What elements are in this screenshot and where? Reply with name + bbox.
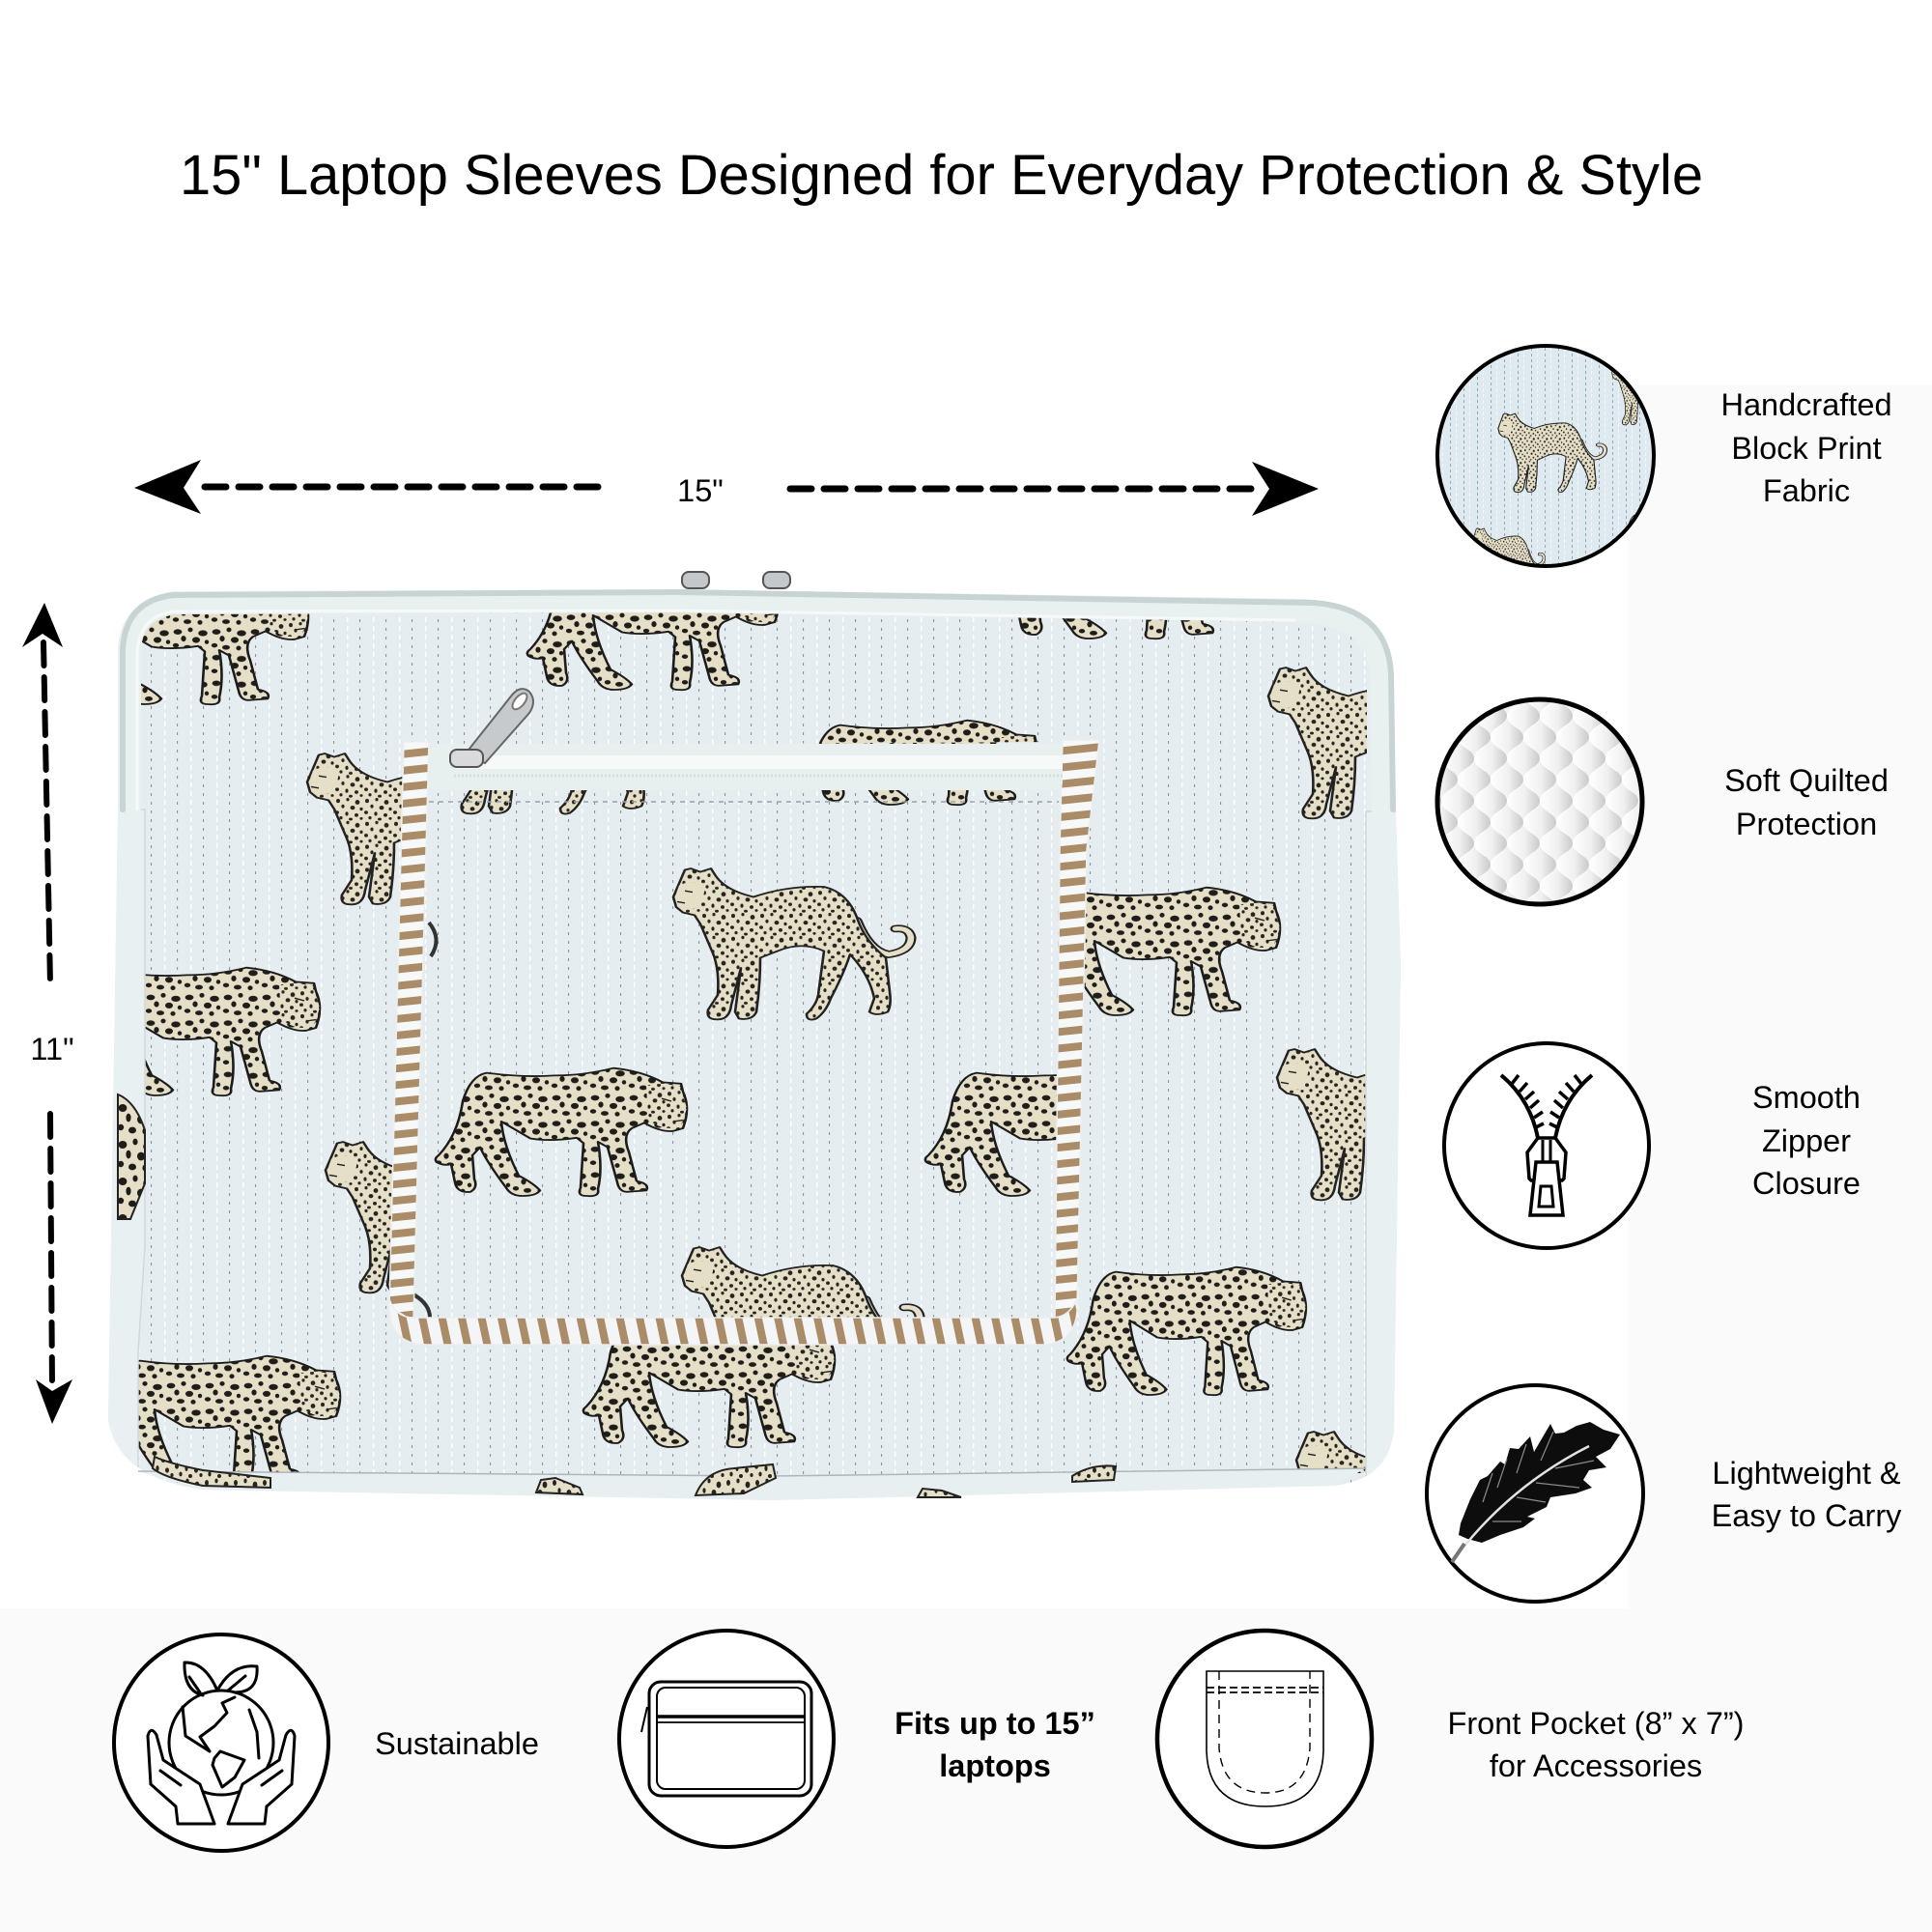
- background panel: bottom band: [0, 1608, 1932, 1932]
- pocket fabric: [413, 742, 1060, 1323]
- sleeve fabric body: [108, 589, 1401, 1500]
- feature: fits up to 15 inch laptops: [619, 1631, 1095, 1847]
- label: laptops: [939, 1748, 1051, 1783]
- label: Closure: [1752, 1166, 1861, 1201]
- icon: laptop sleeve outline: [619, 1631, 834, 1847]
- label: Fits up to 15”: [895, 1706, 1095, 1741]
- icon: fabric swatch: [1435, 344, 1656, 568]
- label: Lightweight &: [1712, 1456, 1901, 1491]
- quilting lines: [97, 580, 1410, 1507]
- front pocket: [388, 688, 1099, 1346]
- height dimension arrow: [22, 603, 74, 1424]
- leopard prints on sleeve: [57, 511, 1534, 1583]
- label: Sustainable: [375, 1726, 539, 1761]
- pocket quilting: [425, 791, 1053, 1318]
- label: Easy to Carry: [1712, 1498, 1902, 1533]
- background panel: right column: [1628, 384, 1932, 1611]
- laptop sleeve photo: [108, 571, 1401, 1500]
- width dimension arrow: [134, 460, 1319, 516]
- icon: feather: [1427, 1385, 1643, 1602]
- pocket zipper: [429, 744, 1063, 802]
- feature: block print fabric: [1435, 344, 1889, 568]
- pocket leopards: [413, 663, 1177, 1399]
- label: Block Print: [1731, 431, 1882, 466]
- width dimension arrow: 15": [677, 473, 724, 508]
- title: 15" Laptop Sleeves Designed for Everyday Protection & Style: [180, 144, 1703, 207]
- label: Soft Quilted: [1724, 763, 1889, 798]
- feature: front pocket: [1157, 1631, 1745, 1847]
- feature: lightweight: [1427, 1385, 1902, 1602]
- label: Protection: [1736, 807, 1877, 841]
- feature: sustainable: [114, 1634, 539, 1851]
- feature: soft quilted protection: [1437, 699, 1889, 904]
- height dimension arrow: 11": [30, 1032, 74, 1066]
- label: Fabric: [1763, 473, 1850, 508]
- icon: zipper: [1444, 1043, 1649, 1248]
- icon: quilted texture: [1437, 699, 1642, 904]
- re-drawn edge of left leopards over flap: [118, 1094, 145, 1219]
- label: Smooth: [1752, 1080, 1861, 1115]
- label: Handcrafted: [1720, 387, 1892, 422]
- striped binding: [389, 740, 1099, 1345]
- pocket zipper pull: [450, 689, 533, 767]
- label: for Accessories: [1490, 1748, 1702, 1783]
- icon: earth in hands: [114, 1634, 328, 1851]
- label: Front Pocket (8” x 7”): [1447, 1706, 1745, 1741]
- icon: pocket outline: [1157, 1631, 1372, 1847]
- main zipper: [123, 592, 1393, 810]
- label: Zipper: [1762, 1123, 1851, 1158]
- side flaps: [97, 810, 1410, 1507]
- zipper pulls: [682, 572, 790, 588]
- feature: smooth zipper closure: [1444, 1043, 1861, 1248]
- bottom seam and cropped prints: [138, 1457, 1366, 1500]
